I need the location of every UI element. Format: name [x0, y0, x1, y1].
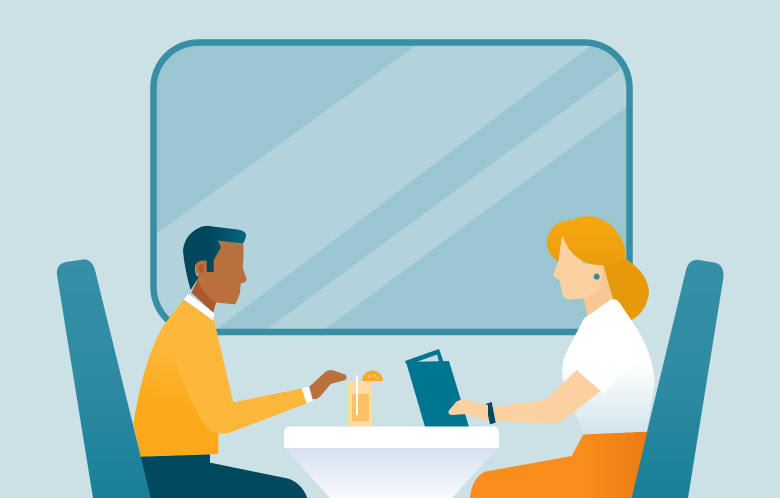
person: woman [448, 216, 655, 498]
seat: right [631, 260, 724, 498]
person: man [133, 226, 347, 498]
table [284, 426, 499, 498]
sweater body [133, 300, 233, 457]
skirt [470, 432, 647, 498]
lemon slice [362, 370, 383, 381]
juice [352, 394, 369, 421]
sweater arm [170, 300, 307, 434]
illustration: train carriage scene [56, 39, 724, 498]
table top [284, 426, 499, 448]
ear [195, 261, 207, 275]
drink [348, 370, 383, 427]
hair top [547, 216, 625, 265]
straw [356, 375, 358, 415]
seat: left [57, 259, 151, 498]
window [150, 42, 630, 332]
neck [583, 265, 613, 317]
collar [184, 294, 214, 320]
arm [492, 370, 601, 424]
glass [348, 381, 372, 427]
earring [594, 274, 600, 280]
table stand [284, 447, 499, 498]
cuff [302, 387, 313, 404]
hand [448, 400, 488, 421]
hair bun [597, 245, 649, 320]
shirt [562, 299, 655, 434]
face [553, 236, 604, 300]
bracelet [486, 402, 496, 424]
menu [405, 349, 488, 427]
hand [309, 370, 347, 399]
neck [191, 278, 217, 313]
trousers [141, 454, 307, 498]
sleeve [577, 328, 641, 394]
hair [183, 226, 246, 290]
face [197, 241, 247, 304]
woman's fingers over menu [448, 400, 488, 421]
